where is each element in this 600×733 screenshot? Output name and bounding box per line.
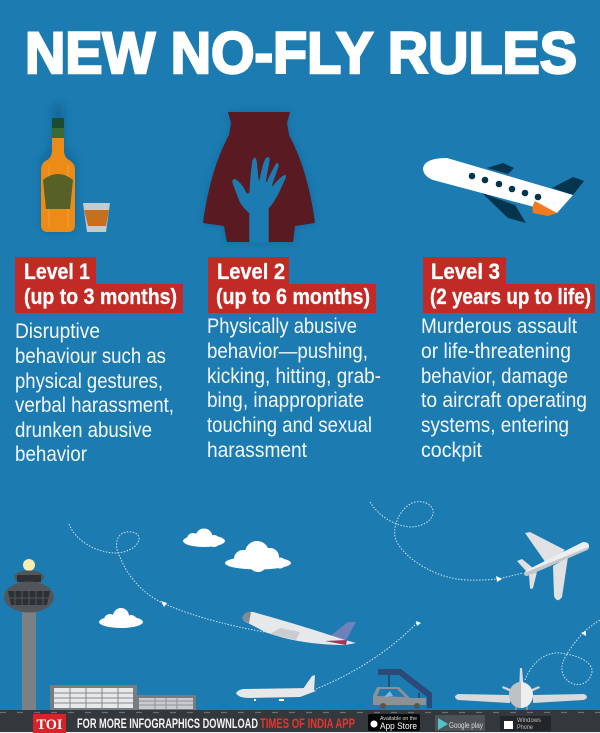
app store badge <box>368 714 420 731</box>
level 2 heading: Level 2 <box>217 259 285 284</box>
level 1 heading: Level 1 <box>24 259 90 284</box>
level 3 description: to aircraft operating <box>421 389 587 412</box>
TOI logo <box>33 714 66 733</box>
level 2 description: behavior—pushing, <box>207 340 368 363</box>
icon: skirt with hand <box>203 112 315 242</box>
level 2 description: bing, inappropriate <box>207 389 364 412</box>
level 2 description: kicking, hitting, grab- <box>207 365 381 388</box>
level 3 heading <box>423 257 595 313</box>
level 1 description: behavior <box>15 443 87 466</box>
panel: level 2 <box>207 257 381 462</box>
TOI logo: TOI <box>36 717 63 733</box>
level 2 description: harassment <box>207 439 307 462</box>
level 2 description: Physically abusive <box>207 315 357 338</box>
level 1 description: behaviour such as <box>15 345 166 368</box>
icon: airplane upper right <box>517 532 589 600</box>
level 1 heading: (up to 3 months) <box>24 284 177 309</box>
google play badge <box>435 715 485 731</box>
icon: airplane on the ground <box>236 675 316 701</box>
level 3 description: Murderous assault <box>421 315 577 338</box>
level 3 description: systems, entering <box>421 414 569 437</box>
level 3 description: or life-threatening <box>421 340 571 363</box>
clouds <box>99 528 291 628</box>
level 3 description <box>421 315 587 462</box>
icon: terminal buildings <box>50 685 196 710</box>
windows phone badge: Windows <box>517 718 541 724</box>
level 2 description: touching and sexual <box>207 414 372 437</box>
level 3 description: behavior, damage <box>421 365 568 388</box>
panel: level 3 <box>421 257 595 462</box>
footer bar <box>0 710 600 733</box>
level 1 description: drunken abusive <box>15 419 152 442</box>
windows phone badge <box>500 716 551 731</box>
level 1 description: Disruptive <box>15 320 100 343</box>
level 2 heading: (up to 6 months) <box>216 284 370 309</box>
level 3 heading: Level 3 <box>431 259 500 284</box>
windows phone badge: Phone <box>517 725 534 731</box>
app store badge: Available on the <box>380 716 417 722</box>
level 1 description <box>15 320 174 466</box>
level 1 description: verbal harassment, <box>15 394 174 417</box>
icon: passenger stairs truck <box>373 669 432 709</box>
level 1 heading <box>15 257 183 313</box>
level 1 description: physical gestures, <box>15 370 163 393</box>
panel: level 1 <box>15 257 183 466</box>
icon: airplane taking off <box>423 158 584 223</box>
icon: control tower <box>4 559 54 710</box>
footer text: FOR MORE INFOGRAPHICS DOWNLOAD <box>77 715 258 731</box>
level 2 heading <box>208 257 376 313</box>
title: NEW NO-FLY RULES <box>25 21 577 86</box>
google play badge: Google play <box>449 721 483 730</box>
app store badge: App Store <box>380 721 417 731</box>
icon: airplane front view <box>455 668 587 711</box>
level 2 description <box>207 315 381 462</box>
level 3 description: cockpit <box>421 439 482 462</box>
footer text: TIMES OF INDIA APP <box>260 715 355 731</box>
flight paths <box>69 502 600 689</box>
icon: whisky bottle and glass <box>41 104 110 232</box>
icon: airplane in flight (middle) <box>243 612 356 645</box>
